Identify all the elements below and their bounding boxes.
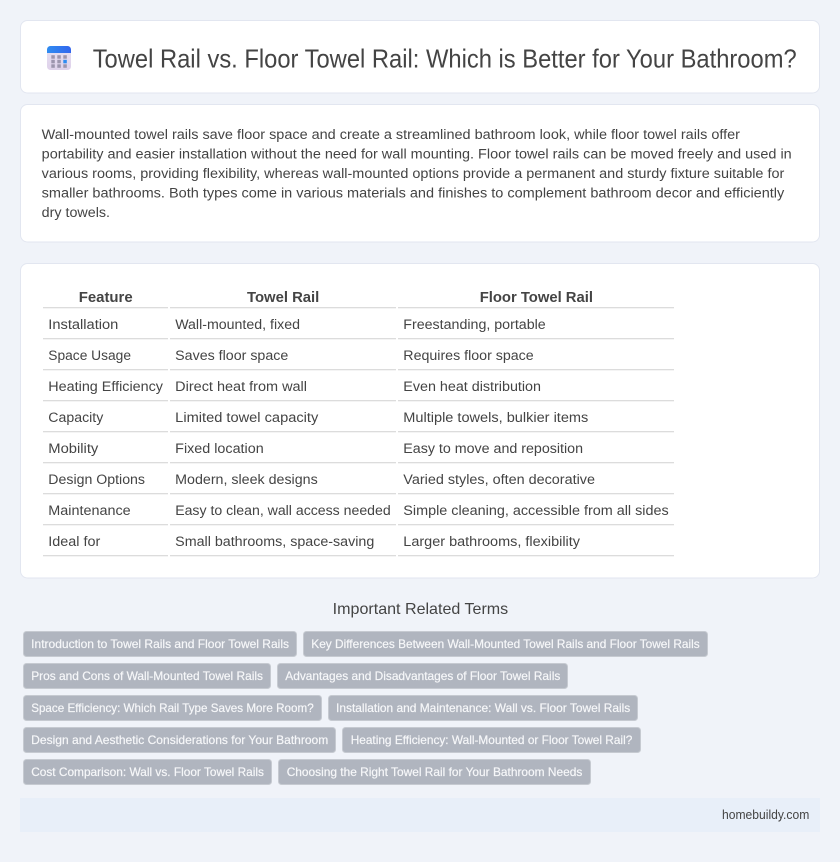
row: heating efficiency: Even heat distribution: [403, 379, 541, 395]
text block: introduction paragraph: portability and easier installation without the need for wall mounting. Floor towel rails can be moved freely and used in: [42, 146, 792, 162]
row: maintenance: Easy to clean, wall access needed: [175, 503, 391, 519]
chip: [24, 760, 272, 784]
panel: comparison table: [20, 264, 820, 578]
chip: [24, 728, 336, 752]
row: space usage: [48, 348, 534, 364]
chip: Introduction to Towel Rails and Floor Towel Rails: [31, 637, 289, 651]
table header row: Feature: [79, 289, 133, 306]
chip: Heating Efficiency: Wall-Mounted or Floor Towel Rail?: [351, 733, 633, 747]
row: capacity: Capacity: [48, 410, 104, 426]
table header row: [79, 289, 593, 306]
chip: [342, 728, 640, 752]
row: space usage: Requires floor space: [403, 348, 534, 364]
row: heating efficiency: Direct heat from wall: [175, 379, 307, 395]
title: Towel Rail vs. Floor Towel Rail: Which is Better for Your Bathroom?: [93, 46, 797, 74]
row: mobility: Easy to move and reposition: [403, 441, 583, 457]
text block: introduction paragraph: various rooms, providing flexibility, whereas wall-mounted options provide a permanent and sturdy fixture suitable for: [42, 166, 785, 182]
text block: introduction paragraph: smaller bathrooms. Both types come in various materials and finishes to complement bathroom decor and efficiently: [42, 186, 785, 202]
row: installation: Freestanding, portable: [403, 317, 546, 333]
row: ideal for: Small bathrooms, space-saving: [175, 534, 374, 550]
row: ideal for: [48, 534, 581, 550]
chip: [304, 632, 708, 656]
row: mobility: [48, 441, 583, 457]
chip: [24, 696, 322, 720]
row: capacity: [48, 410, 588, 426]
chip: Installation and Maintenance: Wall vs. Floor Towel Rails: [336, 701, 630, 715]
heading: important related terms: Important Related Terms: [333, 601, 508, 618]
row: design options: Varied styles, often decorative: [403, 472, 595, 488]
row: mobility: Mobility: [48, 441, 99, 457]
chip: [278, 760, 590, 784]
row: mobility: Fixed location: [175, 441, 264, 457]
row: ideal for: Ideal for: [48, 534, 101, 550]
row: installation: [48, 317, 546, 333]
row: installation: Wall-mounted, fixed: [175, 317, 300, 333]
row: installation: Installation: [48, 317, 118, 333]
footer: [20, 798, 820, 832]
text block: introduction paragraph: Wall-mounted towel rails save floor space and create a streamlined bathroom look, while floor towel rails offer: [42, 127, 740, 143]
text block: introduction paragraph: [42, 127, 792, 221]
row: space usage: Space Usage: [48, 348, 131, 364]
chip: Key Differences Between Wall-Mounted Towel Rails and Floor Towel Rails: [311, 637, 700, 651]
row: heating efficiency: Heating Efficiency: [48, 379, 164, 395]
chip: [328, 696, 638, 720]
chip: Choosing the Right Towel Rail for Your Bathroom Needs: [287, 765, 582, 779]
table header row: Towel Rail: [247, 289, 319, 306]
chip: Space Efficiency: Which Rail Type Saves More Room?: [31, 701, 314, 715]
row: maintenance: Simple cleaning, accessible from all sides: [403, 503, 669, 519]
chip: Advantages and Disadvantages of Floor Towel Rails: [285, 669, 560, 683]
chip: [24, 664, 270, 688]
chip: [24, 632, 296, 656]
table header row: Floor Towel Rail: [480, 289, 593, 306]
row: heating efficiency: [48, 379, 541, 395]
row: design options: [48, 472, 595, 488]
panel: header: [20, 20, 820, 93]
row: ideal for: Larger bathrooms, flexibility: [403, 534, 581, 550]
row: maintenance: [48, 503, 669, 519]
text block: introduction paragraph: dry towels.: [42, 205, 110, 221]
panel: introduction: [20, 104, 820, 242]
row: design options: Design Options: [48, 472, 145, 488]
row: design options: Modern, sleek designs: [175, 472, 318, 488]
row: capacity: Multiple towels, bulkier items: [403, 410, 588, 426]
row: capacity: Limited towel capacity: [175, 410, 319, 426]
row: space usage: Saves floor space: [175, 348, 288, 364]
chip: [278, 664, 568, 688]
row: maintenance: Maintenance: [48, 503, 131, 519]
icon: calendar: [47, 46, 71, 70]
footer site name: homebuildy.com: [722, 807, 809, 822]
chip: Cost Comparison: Wall vs. Floor Towel Rails: [31, 765, 264, 779]
related terms chips: [24, 632, 708, 784]
chip: Pros and Cons of Wall-Mounted Towel Rails: [31, 669, 263, 683]
chip: Design and Aesthetic Considerations for Your Bathroom: [31, 733, 328, 747]
